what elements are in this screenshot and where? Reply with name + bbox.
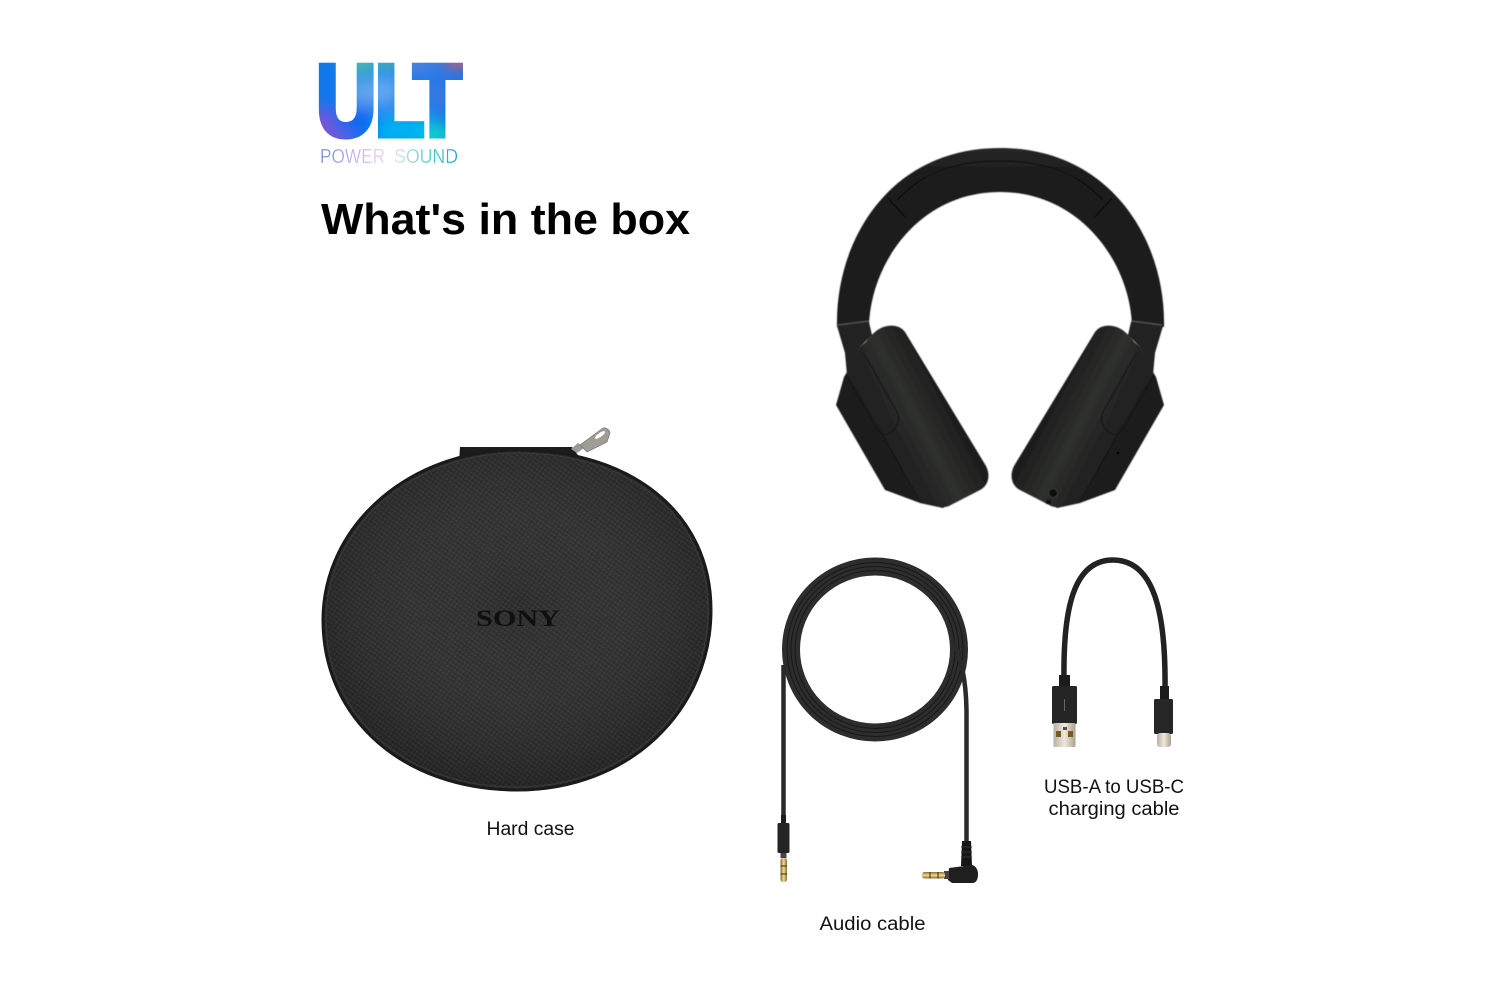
label: USB-A to USB-C charging cable: charging cable xyxy=(1048,799,1180,820)
cable coil xyxy=(787,562,963,736)
case logo: SONY xyxy=(476,606,561,631)
angled plug xyxy=(922,841,978,883)
case body xyxy=(323,450,711,790)
hard case xyxy=(323,428,711,790)
USB-A connector xyxy=(1052,675,1077,747)
audio cable xyxy=(778,562,978,883)
label: USB-A to USB-C charging cable xyxy=(1044,777,1184,820)
title: What's in the box xyxy=(321,195,691,244)
case shading xyxy=(326,453,708,787)
label: USB-A to USB-C charging cable: USB-A to USB-C xyxy=(1044,777,1184,798)
label: hard case: Hard case xyxy=(486,819,574,840)
headband xyxy=(837,148,1164,327)
right ear cup xyxy=(1012,322,1164,508)
headphones xyxy=(836,148,1164,508)
logo: ULT Power Sound xyxy=(318,62,463,163)
logo wordmark: ULT xyxy=(318,62,463,140)
cable left lead xyxy=(781,665,786,823)
case zipper tab xyxy=(459,447,580,462)
label: audio cable: Audio cable xyxy=(820,914,926,935)
logo tagline xyxy=(320,146,458,168)
logo tagline: SOUND xyxy=(394,146,458,168)
left ear cup xyxy=(836,322,988,508)
straight plug xyxy=(778,815,790,882)
cable right lead xyxy=(952,640,966,842)
USB cable wire xyxy=(1064,560,1165,690)
logo tagline: POWER xyxy=(320,146,385,168)
USB-C connector xyxy=(1154,686,1173,747)
USB charging cable xyxy=(1052,560,1173,747)
zipper pull xyxy=(571,428,610,453)
